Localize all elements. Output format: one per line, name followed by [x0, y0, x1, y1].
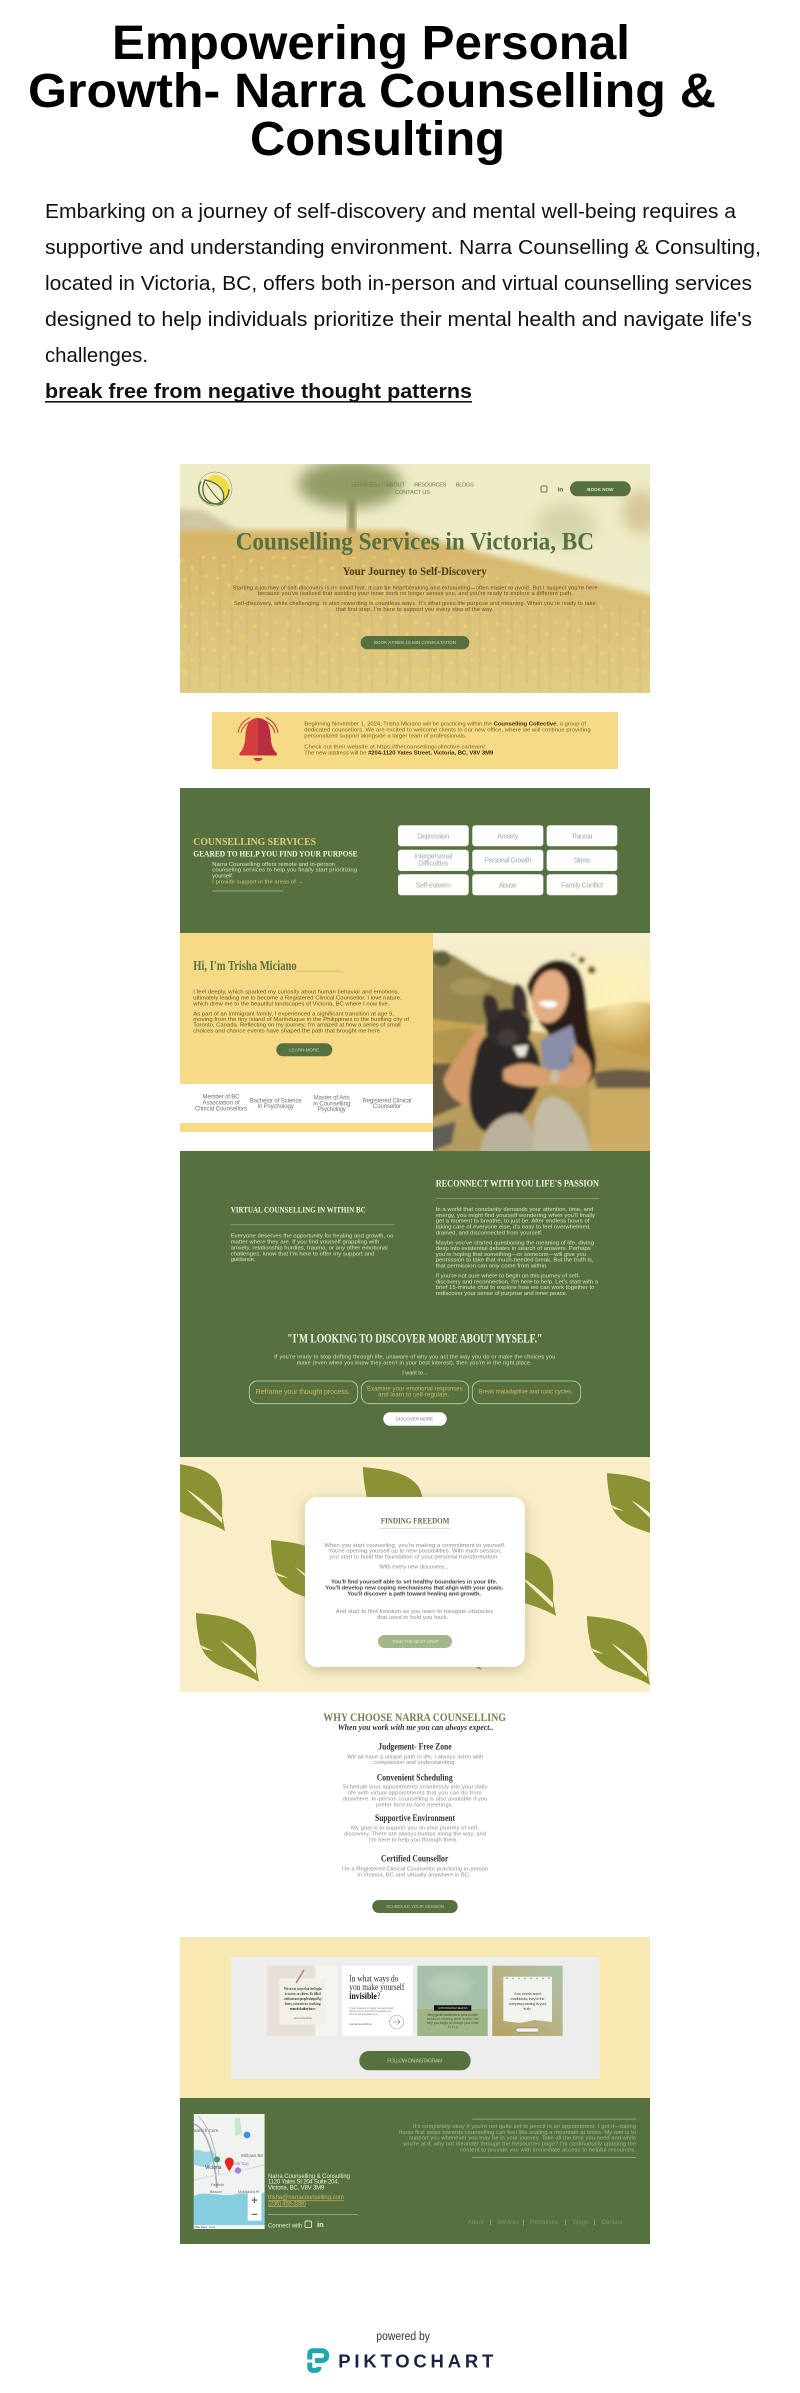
instagram tile 3: story — [448, 2025, 458, 2029]
panel: notice — [212, 712, 618, 769]
navigation: BLOGS — [456, 483, 474, 489]
footer navigation: Services — [497, 2220, 519, 2226]
goal pills: Examine your emotional responses — [367, 1387, 463, 1393]
credentials: Member of BC — [202, 1094, 240, 1100]
contact details: Victoria, BC, V8V 3M9 — [268, 2186, 325, 2192]
hero text: that first step, I'm here to support you every step of the way. — [336, 607, 494, 613]
column: virtual counselling: VIRTUAL COUNSELLING IN WITHIN BC — [231, 1206, 366, 1215]
services intro text: counseling services to help you finally start prioritizing — [212, 868, 357, 874]
title: Growth- Narra Counselling & — [28, 65, 716, 118]
reasons: We all have a unique path in life, I always listen with — [347, 1754, 483, 1760]
bio text: ultimately leading me to become a Registered Clinical Counsellor. I love nature, — [193, 995, 402, 1001]
bio text: Toronto, Canada. Reflecting on my journey, I'm amazed at how a series of small — [193, 1023, 401, 1029]
column: reconnect with your life's passion: RECONNECT WITH YOU LIFE'S PASSION — [436, 1180, 599, 1190]
heading: GEARED TO HELP YOU FIND YOUR PURPOSE — [193, 850, 358, 859]
button: schedule your session — [372, 1900, 458, 1913]
contact details: trisha@narracounselling.com — [268, 2195, 344, 2201]
panel: finding freedom — [162, 1457, 670, 1692]
instagram tile 4: Your needs aren't — [514, 1991, 542, 1996]
map: McMicking Pt — [238, 2190, 259, 2194]
column: virtual counselling: Everyone deserves the opportunity for healing and growth, no — [231, 1234, 394, 1240]
services intro text — [212, 862, 357, 891]
reasons: Supportive Environment — [375, 1813, 455, 1823]
footer navigation: | — [490, 2220, 492, 2226]
instagram tile 1: with rumors people shaped by — [284, 1996, 322, 2001]
button: follow on instagram — [359, 2051, 471, 2070]
instagram tile 1: narracounselling — [294, 2017, 312, 2020]
intro paragraph: Embarking on a journey of self-discovery and mental well-being requires a — [45, 201, 737, 223]
credentials: Counsellor — [373, 1104, 401, 1110]
intro paragraph — [45, 201, 761, 367]
button: learn more — [276, 1043, 332, 1056]
notice text: personalized support alongside a larger team of professionals. — [304, 733, 467, 739]
reasons: I'm a Registered Clinical Counsellor practising in-person — [342, 1866, 488, 1872]
hero text — [233, 585, 597, 613]
instagram tile 2: you make yourself — [349, 1982, 404, 1992]
reasons: anywhere. In-person counselling is also available if you — [343, 1797, 487, 1803]
credentials: Registered Clinical — [362, 1098, 412, 1104]
panel: virtual counselling and passion — [180, 1151, 650, 1457]
instagram tile 2: invisible? — [349, 1991, 380, 2001]
instagram tile 4: roadblocks; they're the — [510, 1996, 545, 2001]
column: virtual counselling: matter where they are. If you find yourself grappling with — [231, 1239, 379, 1245]
service buttons: Family Conflict — [561, 882, 603, 889]
notice text: The new address will be #204-1120 Yates Street, Victoria, BC, V8V 3M9 — [304, 751, 494, 757]
column: reconnect with your life's passion: rediscover your sense of purpose and inner peace. — [436, 1291, 568, 1297]
social icons — [305, 2220, 324, 2229]
button: book now — [570, 481, 631, 496]
hero text: Self-discovery, while challenging, is also rewarding in countless ways. It's what gives life purpose and meaning. When you're ready to take — [234, 601, 596, 607]
logo — [198, 472, 232, 506]
button: discover more — [383, 1412, 447, 1426]
map: − — [251, 2209, 258, 2221]
button: free consultation: BOOK A FREE 15 MIN CONSULTATION — [374, 640, 456, 645]
panel: why choose — [323, 1711, 506, 1913]
goal pills: Reframe your thought process. — [256, 1389, 350, 1396]
map: Oak Bay — [232, 2161, 250, 2166]
map: aanich Core — [194, 2128, 219, 2133]
reasons: My goal is to support you on your journey of self- — [351, 1826, 479, 1832]
credentials: in Psychology — [258, 1104, 294, 1110]
notice text: Check out their website at https://thecounsellingcollective.ca/team/. — [304, 745, 487, 751]
heading — [193, 837, 358, 859]
bio text: which drew me to the beautiful landscapes of Victoria, BC where I now live. — [192, 1001, 390, 1007]
footer message: support you whenever you may be in your journey. Take all the time you need and while — [409, 2136, 636, 2142]
service buttons: Self-esteem — [416, 882, 451, 889]
instagram tile 2: when you're around the people you — [349, 2009, 392, 2013]
service buttons: Personal Growth — [484, 858, 531, 865]
section heading — [323, 1711, 506, 1732]
credentials: in Counselling — [313, 1101, 350, 1107]
icon: linkedin: in — [558, 486, 563, 494]
intro paragraph: designed to help individuals prioritize their mental health and navigate life's — [45, 309, 752, 331]
intro paragraph: located in Victoria, BC, offers both in-person and virtual counselling services — [45, 273, 752, 295]
instagram tile 1 — [267, 1966, 338, 2036]
contact details: (236) 458-3390 — [268, 2201, 307, 2207]
reasons: I'm here to help you through them. — [369, 1837, 458, 1843]
button: follow on instagram: FOLLOW ON INSTAGRAM — [387, 2058, 443, 2064]
service buttons: Anxiety — [497, 833, 519, 840]
card text — [324, 1543, 506, 1621]
column: virtual counselling: guidance. — [231, 1257, 256, 1263]
section heading: When you work with me you can always expect.. — [338, 1722, 493, 1732]
hero heading: Counselling Services in Victoria, BC — [236, 528, 594, 555]
button: book now: BOOK NOW — [587, 487, 614, 492]
button: schedule your session: SCHEDULE YOUR SESSION — [386, 1904, 445, 1910]
footer navigation — [468, 2220, 623, 2226]
goal pills — [249, 1381, 581, 1404]
navigation: RESOURCES — [414, 483, 447, 489]
title — [28, 17, 716, 166]
footer message: those first steps towards counselling can feel like scaling a mountain at times. My aim is to — [399, 2130, 636, 2136]
column: reconnect with your life's passion: taking care of everyone else, it's easy to feel overwhelmed, — [436, 1225, 591, 1231]
contact details: Narra Counselling & Consulting — [268, 2174, 350, 2180]
instagram tile 1: We act in ways that feel right — [284, 1986, 323, 1991]
service buttons — [398, 825, 617, 895]
column: reconnect with your life's passion: drained, and disconnected from yourself. — [436, 1231, 543, 1237]
contact details: 1120 Yates St 204 Suite 204, — [268, 2180, 339, 2186]
card text: You're opening yourself up to new possibilities. With each session, — [328, 1549, 502, 1555]
contact details: Connect with — [268, 2223, 302, 2229]
hero text: Starting a journey of self-discovery is no small feat. It can be heartbreaking and exhausting—often easier to avoid. But I suspect you're here — [233, 585, 597, 591]
link: break free from negative thought patterns: break free from negative thought patterns — [45, 381, 472, 403]
map: Map Data · 1 km — [194, 2225, 216, 2229]
hero background photo — [170, 460, 662, 700]
credentials: Clinical Counsellors — [195, 1106, 247, 1112]
reasons: life with virtual appointments that you can do from — [348, 1791, 482, 1797]
credentials: Bachelor of Science — [250, 1098, 302, 1104]
column: virtual counselling: anxiety, relationship hurdles, trauma, or any other emotional — [231, 1245, 388, 1251]
card text: With every new discovery... — [379, 1565, 449, 1571]
title: Consulting — [250, 113, 505, 166]
footer message — [399, 2119, 636, 2158]
panel: instagram — [180, 1937, 650, 2098]
icon: piktochart mark — [310, 2351, 327, 2370]
column: reconnect with your life's passion: In a world that constantly demands your attention, time, and — [436, 1207, 593, 1213]
map: Fairfield — [211, 2183, 224, 2187]
footer navigation: About — [468, 2220, 484, 2226]
instagram tile 4: truth. — [524, 2006, 532, 2011]
card text: that used to hold you back. — [377, 1615, 449, 1621]
footer navigation: | — [565, 2220, 567, 2226]
map: + — [251, 2195, 258, 2207]
instagram tile 2 — [342, 1966, 413, 2036]
instagram tile 2: narracounselling — [349, 2022, 372, 2026]
map: Beacon — [210, 2190, 222, 2194]
heading: Hi, I'm Trisha Miciano: Hi, I'm Trisha Miciano — [193, 959, 297, 974]
footer navigation: | — [522, 2220, 524, 2226]
button: free consultation — [361, 636, 469, 649]
column: reconnect with your life's passion — [436, 1180, 599, 1297]
social icons: in — [317, 2220, 324, 2229]
title: Empowering Personal — [112, 17, 630, 70]
reasons: Judgement- Free Zone — [378, 1741, 452, 1751]
credentials — [195, 1094, 412, 1113]
quote heading: "I'M LOOKING TO DISCOVER MORE ABOUT MYSELF." — [287, 1330, 542, 1345]
navigation: ▾ — [378, 483, 380, 488]
column: reconnect with your life's passion: brief 15-minute chat to explore how we can work together to — [436, 1285, 595, 1291]
button: take the next step: TAKE THE NEXT STEP — [392, 1639, 438, 1645]
reasons — [342, 1741, 488, 1878]
services intro text: yourself. — [212, 873, 234, 879]
button: learn more: LEARN MORE — [289, 1048, 319, 1054]
footer navigation: Resources — [530, 2220, 558, 2226]
bio text: As part of an immigrant family, I experienced a significant transition at age 9, — [193, 1011, 394, 1017]
bio text: I feel deeply, which sparked my curiosity about human behavior and emotions, — [193, 990, 400, 996]
instagram tile 2: In what ways do — [349, 1974, 399, 1984]
panel: about Trisha — [180, 927, 673, 1157]
footer navigation: | — [594, 2220, 596, 2226]
card — [305, 1497, 525, 1667]
icon: bell — [238, 718, 278, 761]
service buttons: Difficulties — [418, 861, 449, 868]
column: reconnect with your life's passion: permission to take that much-needed break. But the truth is, — [436, 1258, 594, 1264]
column: reconnect with your life's passion: get a moment to breathe, to just be. After endless hours of — [436, 1219, 590, 1225]
service buttons: Trauma — [572, 833, 593, 840]
reasons: in Victoria, BC and virtually anywhere in BC. — [357, 1872, 471, 1878]
footer message: It's completely okay if you're not quite set to pencil in an appointment. I get it—taking — [413, 2124, 636, 2130]
card text: you start to build the foundation of your personal transformation. — [329, 1555, 499, 1561]
section heading: WHY CHOOSE NARRA COUNSELLING — [323, 1711, 506, 1724]
footer message: content to provide you with immediate access to helpful resources. — [460, 2147, 636, 2153]
service buttons: Interpersonal — [414, 854, 453, 861]
reasons: discovery. There are always bumps along the way, and — [344, 1832, 486, 1838]
column: reconnect with your life's passion: Maybe you've started questioning the meaning of life, diving — [436, 1240, 594, 1246]
credentials: Master of Arts — [314, 1095, 350, 1101]
card text: You'll develop new coping mechanisms that align with your goals. — [325, 1585, 504, 1591]
contact details — [268, 2174, 358, 2229]
instagram tile 2: If you happen to make yourself small — [349, 2006, 394, 2010]
reasons: prefer face-to-face meetings. — [376, 1802, 454, 1808]
instagram tile 2: love or want to belong to — [349, 2012, 378, 2016]
intro paragraph: supportive and understanding environment. Narra Counselling & Consulting, — [45, 237, 761, 259]
card text: You'll find yourself able to set healthy boundaries in your life. — [331, 1580, 498, 1586]
powered by label: powered by — [376, 2331, 430, 2343]
quote text: If you're ready to stop drifting through life, unaware of why you act the way you do or make the choices you — [274, 1355, 555, 1361]
quote text: I want to... — [402, 1370, 428, 1376]
quote text: make (even when you know they aren't in your best interest), then you're in the right place. — [297, 1360, 532, 1366]
button: discover more: DISCOVER MORE — [396, 1417, 433, 1423]
card text: And start to find freedom as you learn to navigate obstacles — [336, 1609, 493, 1615]
column: reconnect with your life's passion: you're hoping that something—or someone—will give you — [436, 1252, 586, 1258]
column: reconnect with your life's passion: energy, you might find yourself wondering when you'll finally — [436, 1213, 595, 1219]
panel: counselling services — [180, 788, 650, 933]
service buttons: Depression — [417, 833, 449, 840]
card text: You'll discover a path toward healing and growth. — [347, 1591, 481, 1597]
photo: Trisha with dog — [433, 933, 650, 1151]
instagram tile 3 — [417, 1966, 488, 2036]
services intro text: Narra Counselling offers remote and in-person — [212, 862, 335, 868]
services intro text: I provide support in the areas of → — [212, 879, 303, 885]
button: take the next step — [378, 1635, 452, 1648]
heading: COUNSELLING SERVICES — [193, 837, 316, 848]
reasons: Convenient Scheduling — [377, 1772, 453, 1782]
panel: hero — [170, 460, 662, 700]
notice text — [304, 722, 591, 757]
instagram tile 3: help you begin to change your inner — [427, 2021, 480, 2025]
column: virtual counselling: challenges, know that I'm here to offer my support and — [231, 1251, 374, 1257]
column: reconnect with your life's passion: If you're not sure where to begin on this journey of self- — [436, 1273, 580, 1279]
service buttons: Stress — [574, 858, 591, 865]
instagram tile 3: because naming what arises can — [427, 2017, 479, 2021]
credentials: Association of — [202, 1100, 240, 1106]
intro paragraph: challenges. — [45, 345, 148, 367]
instagram tile 1: fears, narratives, making — [285, 2001, 321, 2007]
footer navigation: Blogs — [573, 2220, 588, 2226]
instagram tile 4: compass pointing to your — [508, 2001, 547, 2006]
footer navigation: Contact — [602, 2220, 623, 2226]
bio text: moving from the tiny island of Marinduque in the Philippines to the bustling city of — [193, 1017, 409, 1023]
reasons: Schedule your appointments seamlessly into your daily — [343, 1785, 487, 1791]
map — [194, 2114, 265, 2229]
bio text: choices and chance events have shaped the path that brought me here. — [193, 1029, 382, 1035]
instagram tile 3: Bring gentle awareness to what you feel — [428, 2013, 478, 2017]
icon: instagram — [541, 486, 547, 492]
instagram tile 3: ACKNOWLEDGE FEELINGS — [438, 2006, 468, 2010]
card heading: FINDING FREEDOM — [381, 1516, 450, 1525]
column: reconnect with your life's passion: discovery and reconnection, I'm here to help. Let's start with a — [436, 1279, 599, 1285]
bio text — [192, 990, 409, 1035]
card heading — [380, 1516, 450, 1529]
hero text: because you've realized that avoiding your inner work no longer serves you, and you're ready to explore a different path. — [258, 591, 573, 597]
instagram tile 1: to some, or others. It's filled — [285, 1991, 321, 1997]
navigation: ABOUT — [386, 483, 406, 489]
goal pills: Break maladaptive and toxic cycles. — [479, 1390, 573, 1396]
instagram tile 1: sense of what they know — [290, 2006, 316, 2011]
credentials: Psychology — [318, 1107, 346, 1113]
leaves — [162, 1462, 670, 1685]
instagram tile 4 — [492, 1966, 563, 2036]
column: virtual counselling — [231, 1206, 394, 1263]
map: Willows Be — [241, 2153, 264, 2158]
notice text: Beginning November 1, 2024, Trisha Miciano will be practicing within the Counselling Collective, a group of — [304, 722, 586, 728]
quote text — [274, 1355, 555, 1376]
panel: footer — [180, 2098, 650, 2244]
map: Victoria — [205, 2165, 222, 2171]
notice text: dedicated counsellors. We are excited to welcome clients to our new office, where we will continue providing — [304, 728, 591, 734]
reasons: Certified Counsellor — [381, 1853, 448, 1863]
navigation: SERVICES — [351, 483, 377, 489]
hero subheading: Your Journey to Self-Discovery — [343, 564, 487, 578]
piktochart logo: PIKTOCHART — [338, 2350, 494, 2371]
column: reconnect with your life's passion: deep into existential debates in search of answers. Perhaps — [436, 1246, 591, 1252]
goal pills: and learn to self-regulate. — [378, 1392, 450, 1398]
navigation: CONTACT US — [395, 490, 430, 496]
service buttons: Abuse — [499, 882, 517, 889]
reasons: compassion and understanding. — [373, 1760, 456, 1766]
card text: When you start counseling, you're making a commitment to yourself. — [324, 1543, 506, 1549]
column: reconnect with your life's passion: that permission can only come from within. — [436, 1264, 548, 1270]
footer message: you're at it, why not meander through the Resources page? I'm continuously updating the — [403, 2141, 636, 2147]
navigation — [351, 483, 474, 496]
